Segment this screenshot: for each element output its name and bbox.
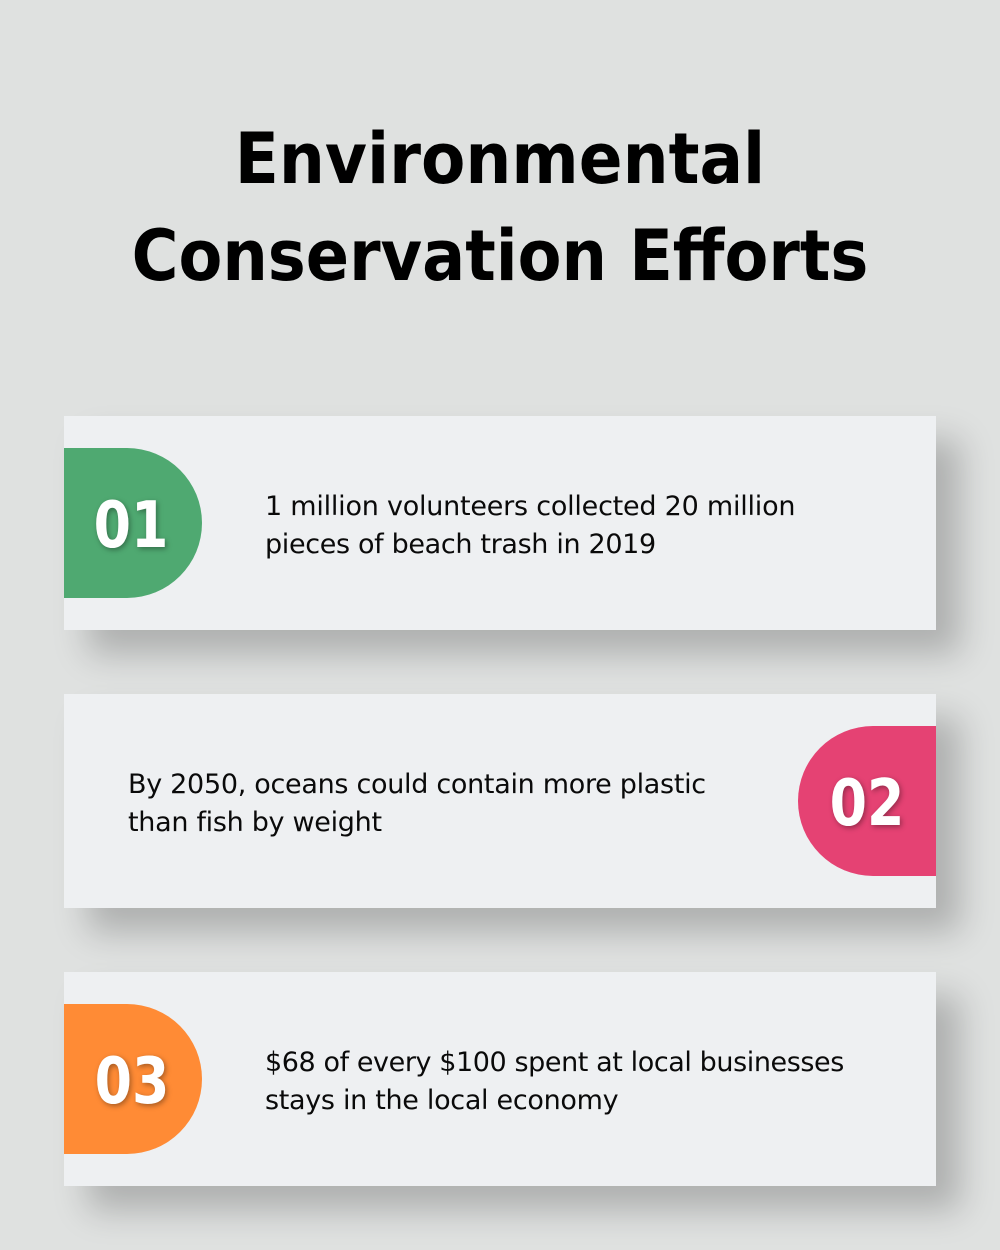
badge 03: 03 (95, 1045, 169, 1119)
text: volunteers (265, 491, 795, 560)
badge 03 (64, 1004, 202, 1154)
panel: card 01 (64, 416, 936, 630)
badge 02 (798, 726, 936, 876)
text: local economy: stays in the local economy (265, 1085, 618, 1116)
text: local economy (265, 1047, 844, 1116)
badge 01: 01 (94, 489, 168, 563)
panel: card 02 (64, 694, 936, 908)
title: Environmental (235, 118, 765, 200)
text: plastic: than fish by weight (128, 807, 382, 838)
title (132, 118, 868, 297)
text: local economy: $68 of every $100 spent at local businesses (265, 1047, 844, 1078)
text: volunteers: pieces of beach trash in 2019 (265, 529, 656, 560)
text: plastic (128, 769, 706, 838)
text: volunteers: 1 million volunteers collected 20 million (265, 491, 795, 522)
text: plastic: By 2050, oceans could contain more plastic (128, 769, 706, 800)
badge 01 (64, 448, 202, 598)
title: Conservation Efforts (132, 215, 868, 297)
badge 02: 02 (830, 767, 904, 841)
panel: card 03 (64, 972, 936, 1186)
